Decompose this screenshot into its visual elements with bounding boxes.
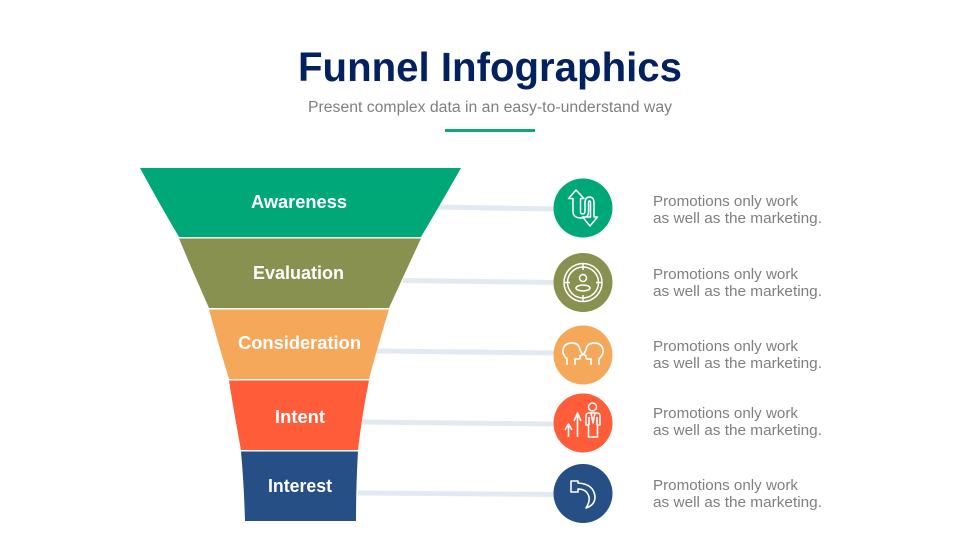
text block: row 2 bbox=[653, 267, 822, 300]
funnel bbox=[140, 168, 461, 521]
funnel tier: Interest bbox=[241, 452, 358, 521]
funnel tier: Interest: Interest bbox=[268, 476, 332, 496]
text block: row 1: as well as the marketing. bbox=[653, 211, 822, 227]
funnel tier: Consideration bbox=[209, 310, 389, 379]
icon: two heads facing bbox=[554, 326, 612, 384]
text block: row 1: Promotions only work bbox=[653, 194, 799, 210]
text block: row 2: as well as the marketing. bbox=[653, 284, 822, 300]
text block: row 4: Promotions only work bbox=[653, 406, 799, 422]
title: Funnel Infographics bbox=[298, 44, 682, 90]
text block: row 5: as well as the marketing. bbox=[653, 495, 822, 511]
funnel tier: Awareness bbox=[140, 168, 461, 237]
funnel tier: Intent bbox=[229, 380, 369, 450]
funnel tier: Intent: Intent bbox=[275, 407, 325, 427]
text block: row 3: as well as the marketing. bbox=[653, 356, 822, 372]
subtitle: Present complex data in an easy-to-understand way bbox=[308, 99, 672, 116]
text block: row 1 bbox=[653, 194, 822, 227]
text block: row 4 bbox=[653, 406, 822, 439]
text block: row 4: as well as the marketing. bbox=[653, 423, 822, 439]
text block: row 3: Promotions only work bbox=[653, 339, 799, 355]
icon: up and down arrows bbox=[554, 178, 612, 238]
funnel tier: Evaluation: Evaluation bbox=[253, 263, 344, 283]
text block: row 5: Promotions only work bbox=[653, 478, 799, 494]
text block: row 3 bbox=[653, 339, 822, 372]
text block: row 5 bbox=[653, 478, 822, 511]
icon: person with growth arrows bbox=[554, 394, 612, 452]
funnel tier: Awareness: Awareness bbox=[251, 192, 347, 212]
connector lines bbox=[358, 207, 556, 494]
funnel tier: Evaluation bbox=[179, 238, 421, 308]
funnel tier: Consideration: Consideration bbox=[238, 333, 361, 353]
icon: return arrow bbox=[554, 464, 612, 523]
icon: person in target bbox=[554, 253, 612, 312]
title accent rule bbox=[445, 129, 535, 132]
text block: row 2: Promotions only work bbox=[653, 267, 799, 283]
